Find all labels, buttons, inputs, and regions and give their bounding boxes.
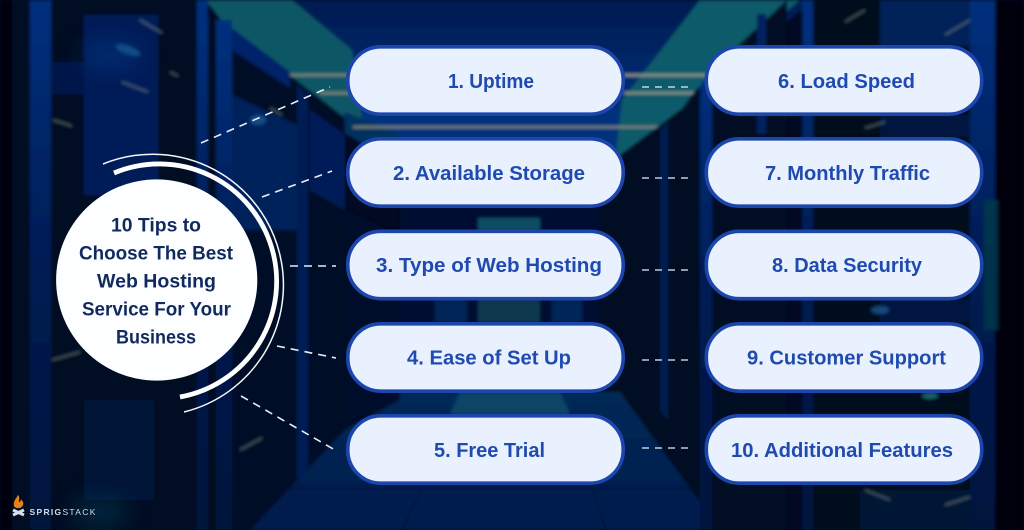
- floor: [250, 392, 760, 530]
- pill 3: Type of Web Hosting: [348, 231, 623, 299]
- pill 10: Additional Features: 10. Additional Features: [731, 440, 953, 462]
- pill 9: Customer Support: 9. Customer Support: [747, 348, 946, 370]
- icon: flame and logs: [13, 495, 24, 515]
- pill 7: Monthly Traffic: 7. Monthly Traffic: [765, 163, 930, 185]
- pill 8: Data Security: [706, 231, 982, 299]
- pill 4: Ease of Set Up: 4. Ease of Set Up: [407, 348, 571, 370]
- logo: SprigStack: [13, 495, 97, 517]
- title text: Choose The Best: [79, 242, 233, 264]
- dashed connectors: left circle to pills: [201, 87, 336, 450]
- title text: 10 Tips to: [111, 214, 201, 236]
- left racks: [0, 0, 400, 530]
- pill 6: Load Speed: 6. Load Speed: [778, 71, 915, 93]
- pill 2: Available Storage: 2. Available Storage: [393, 163, 585, 185]
- pill 9: Customer Support: [706, 324, 982, 391]
- pill 5: Free Trial: 5. Free Trial: [434, 440, 545, 462]
- white disc: [56, 179, 257, 381]
- pill 4: Ease of Set Up: [348, 324, 623, 391]
- thick arc: [114, 164, 277, 397]
- ceiling: [205, 0, 815, 205]
- pill 7: Monthly Traffic: [706, 139, 982, 206]
- title text: Web Hosting: [97, 270, 216, 292]
- end of aisle: [400, 205, 620, 400]
- pill 6: Load Speed: [706, 47, 982, 114]
- pill 8: Data Security: 8. Data Security: [772, 255, 923, 277]
- pill 10: Additional Features: [706, 416, 982, 483]
- central title circle: [56, 154, 283, 412]
- title text: Service For Your: [82, 298, 231, 320]
- pill 5: Free Trial: [348, 416, 623, 483]
- right racks: [600, 0, 1024, 530]
- pill 1: Uptime: 1. Uptime: [448, 71, 534, 93]
- outer thin arc: [103, 154, 283, 412]
- pill 2: Available Storage: [348, 139, 623, 206]
- wordmark: SPRIGSTACK: [30, 507, 97, 517]
- title text: Business: [116, 326, 196, 348]
- title text: [79, 214, 233, 348]
- pill 1: Uptime: [348, 47, 623, 114]
- pill 3: Type of Web Hosting: 3. Type of Web Hosting: [376, 255, 602, 277]
- dashed connectors: between pill columns: [642, 87, 688, 448]
